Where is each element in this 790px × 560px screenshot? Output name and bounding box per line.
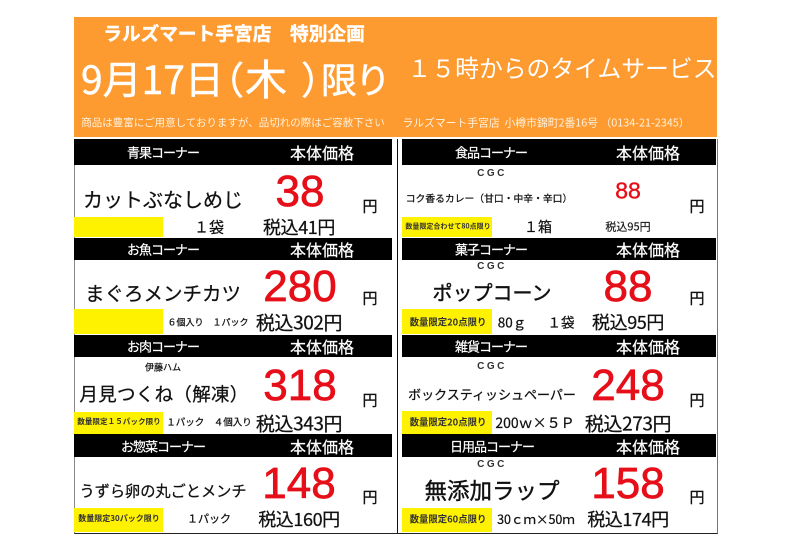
header panel xyxy=(74,17,717,137)
corner header bar xyxy=(74,335,392,357)
corner label: お魚コーナー xyxy=(127,240,199,258)
corner label: 雑貨コーナー xyxy=(455,336,527,356)
yen: 円 xyxy=(362,486,378,508)
tax price: 税込343円 xyxy=(256,410,342,436)
corner label: 菓子コーナー xyxy=(455,240,527,258)
heading: time service: １５時からのタイムサービス xyxy=(408,49,716,84)
panel: right column frame xyxy=(397,139,718,534)
yen: 円 xyxy=(362,196,378,216)
tax price: 税込302円 xyxy=(256,308,342,336)
price label: 本体価格 xyxy=(290,334,354,358)
quantity limit: 数量限定20点限り xyxy=(410,414,486,428)
price label: 本体価格 xyxy=(616,237,680,261)
price: 38 xyxy=(276,167,324,216)
price: 148 xyxy=(262,459,336,508)
pack weight: 80ｇ xyxy=(498,311,526,331)
tax price: 税込174円 xyxy=(587,506,669,532)
corner label: 食品コーナー xyxy=(455,142,527,162)
yen: 円 xyxy=(362,390,378,410)
item: snack corner xyxy=(402,238,716,334)
item: household goods corner xyxy=(402,335,716,434)
yellow quantity tag xyxy=(74,309,163,334)
pack size: １箱 xyxy=(524,217,552,237)
quantity limit: 数量限定60点限り xyxy=(410,511,486,525)
product name: 無添加ラップ xyxy=(424,474,560,506)
pack size: ６個入り １パック xyxy=(167,316,249,328)
yen: 円 xyxy=(362,288,378,308)
pack size: １パック xyxy=(187,510,231,526)
yen: 円 xyxy=(689,486,705,508)
brand: CGC xyxy=(477,361,507,372)
price label: 本体価格 xyxy=(290,434,354,458)
panel: left column frame xyxy=(74,139,398,534)
yellow quantity tag xyxy=(74,217,163,237)
brand: CGC xyxy=(477,261,507,272)
yellow quantity tag xyxy=(402,411,492,434)
corner label: お肉コーナー xyxy=(127,336,199,356)
price label: 本体価格 xyxy=(616,140,680,164)
product name: まぐろメンチカツ xyxy=(85,277,241,306)
heading: date: 木 xyxy=(245,47,287,108)
pack size: 200ｗ×５Ｐ xyxy=(495,413,575,433)
brand: CGC xyxy=(477,168,507,179)
quantity limit: 数量限定１５パック限り xyxy=(77,416,161,427)
corner header bar xyxy=(402,434,716,457)
pack size: １袋 xyxy=(194,216,224,238)
yellow quantity tag xyxy=(74,412,163,434)
quantity limit: 数量限定20点限り xyxy=(410,314,486,328)
corner label: お惣菜コーナー xyxy=(121,436,205,456)
brand: CGC xyxy=(477,459,507,470)
product name: コク香るカレー（甘口・中辛・辛口） xyxy=(406,191,572,205)
note: stock notice: 商品は豊富にご用意しておりますが、品切れの際はご容赦下さい xyxy=(81,115,385,130)
quantity limit: 数量限定30パック限り xyxy=(78,513,160,524)
price: 88 xyxy=(604,262,652,311)
price: 318 xyxy=(263,361,337,410)
price: 280 xyxy=(263,262,337,311)
tax price: 税込273円 xyxy=(585,410,671,436)
item: grocery corner xyxy=(402,139,716,237)
product name: 月見つくね（解凍） xyxy=(79,381,249,407)
yen: 円 xyxy=(689,288,705,308)
corner label: 日用品コーナー xyxy=(450,436,534,456)
corner header bar xyxy=(402,335,716,357)
yellow quantity tag xyxy=(74,508,163,532)
item: meat corner xyxy=(74,335,392,434)
product name: ボックスティッシュペーパー xyxy=(408,384,576,404)
heading: store and special offer: ラルズマート手宮店 特別企画 xyxy=(103,20,365,47)
corner header bar xyxy=(74,434,392,457)
price: 158 xyxy=(591,459,665,508)
heading: date: 9月17日 xyxy=(81,50,224,106)
heading: date: ） xyxy=(301,50,339,105)
pack size: 30ｃｍ×50ｍ xyxy=(497,509,575,528)
yen: 円 xyxy=(689,390,705,410)
tax price: 税込160円 xyxy=(258,506,340,532)
yen: 円 xyxy=(689,196,705,216)
maker: 伊藤ハム xyxy=(145,360,181,374)
yellow quantity tag xyxy=(402,309,492,334)
yellow quantity tag xyxy=(402,508,492,532)
pack size: １袋 xyxy=(548,311,574,331)
price label: 本体価格 xyxy=(290,237,354,261)
item: produce corner xyxy=(74,139,392,237)
product name: うずら卵の丸ごとメンチ xyxy=(79,479,247,501)
quantity limit: 数量限定合わせて80点限り xyxy=(405,222,491,232)
item: deli corner xyxy=(74,434,392,532)
tax price: 税込95円 xyxy=(592,309,664,335)
tax price: 税込41円 xyxy=(263,214,335,240)
price label: 本体価格 xyxy=(616,334,680,358)
corner header bar xyxy=(402,238,716,260)
heading: date: （ xyxy=(206,50,244,105)
tax price: 税込95円 xyxy=(605,218,651,234)
note: store address: ラルズマート手宮店 小樽市錦町2番16号 （0134-21-2345） xyxy=(402,115,690,131)
product name: カットぶなしめじ xyxy=(83,184,243,213)
product name: ポップコーン xyxy=(432,277,552,306)
corner header bar xyxy=(74,139,392,165)
item: fish corner xyxy=(74,238,392,334)
item: daily goods corner xyxy=(402,434,716,532)
price label: 本体価格 xyxy=(616,434,680,458)
price: 88 xyxy=(615,178,641,204)
yellow quantity tag xyxy=(402,217,492,237)
heading: date xyxy=(81,47,389,108)
heading: date: 限り xyxy=(321,52,389,104)
corner header bar xyxy=(74,238,392,260)
corner label: 青果コーナー xyxy=(127,142,199,162)
corner header bar xyxy=(402,139,716,165)
price: 248 xyxy=(591,361,665,410)
pack size: １パック ４個入り xyxy=(166,414,252,428)
price label: 本体価格 xyxy=(290,140,354,164)
